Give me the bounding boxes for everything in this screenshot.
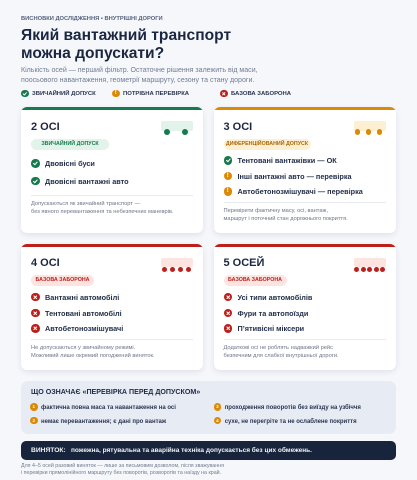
- legend: ЗВИЧАЙНИЙ ДОПУСК: [32, 90, 96, 96]
- note: Можливий лише окремий погоджений виняток.: [31, 353, 155, 359]
- exception banner: пожежна, рятувальна та аварійна техніка допускається без цих обмежень.: [71, 447, 312, 454]
- note: маршрут і поточний стан дорожнього покриття.: [224, 216, 348, 222]
- panel: 3 axles: !: [227, 172, 229, 178]
- intro text: [21, 66, 258, 84]
- panel: what the check means: проходження поворотів без виїзду на узбіччя: [225, 405, 361, 411]
- note: [31, 345, 155, 359]
- item: [31, 324, 123, 333]
- panel: what the check means: фактична повна маса та навантаження на осі: [41, 405, 176, 411]
- panel: what the check means: 1: [32, 404, 35, 409]
- panel: 2 axles: Двовісні буси: [45, 159, 95, 168]
- panel: 5 axles: Фури та автопоїзди: [238, 309, 308, 318]
- exception banner: [21, 441, 396, 460]
- note: Допускаються як звичайний транспорт —: [31, 201, 140, 207]
- panel: what the check means: [21, 381, 396, 434]
- heading: 3 axles: 3 ОСІ: [224, 120, 252, 132]
- panel: 3 axles: Автобетонозмішувачі — перевірка: [238, 187, 363, 196]
- intro text: Кількість осей — перший фільтр. Остаточне рішення залежить від маси,: [21, 67, 258, 74]
- badge: БАЗОВА ЗАБОРОНА: [228, 277, 282, 283]
- panel: 4 axles: Вантажні автомобілі: [45, 293, 119, 302]
- title: можна допускати?: [21, 45, 164, 62]
- item: [31, 159, 95, 168]
- note: [224, 344, 339, 359]
- note: без явного перевантаження та небезпечних маневрів.: [31, 209, 174, 215]
- panel: 5 axles: П’ятивісні міксери: [238, 324, 304, 333]
- item: [224, 172, 352, 180]
- badge: [31, 138, 109, 150]
- footnote: [21, 463, 224, 476]
- exception banner: ВИНЯТОК:: [31, 447, 66, 454]
- check 4: [214, 417, 357, 425]
- item: [31, 293, 119, 302]
- check 2: [30, 417, 166, 425]
- check 3: [214, 403, 361, 411]
- legend: ПОТРІБНА ПЕРЕВІРКА: [123, 90, 189, 96]
- panel: what the check means: 2: [32, 418, 35, 423]
- footnote: Для 4–5 осей разовий виняток — лише за письмовим дозволом, після зважування: [21, 463, 224, 469]
- panel: 5 axles: [214, 244, 396, 370]
- legend: [21, 90, 291, 97]
- legend: БАЗОВА ЗАБОРОНА: [231, 90, 291, 96]
- item: [31, 176, 129, 186]
- footnote: і перевірки прямолінійного маршруту без поворотів, розворотів та наїзду на край.: [21, 470, 221, 476]
- badge: БАЗОВА ЗАБОРОНА: [36, 277, 89, 283]
- note: [224, 208, 348, 222]
- heading: 2 axles: 2 ОСІ: [31, 120, 60, 132]
- note: Не допускаються у звичайному режимі.: [31, 345, 135, 351]
- title: [21, 26, 231, 62]
- note: Додаткові осі не роблять надважкий рейс: [224, 345, 333, 351]
- item: [224, 293, 312, 302]
- icon: 5-axle truck: [354, 258, 386, 272]
- panel: 2 axles: Двовісні вантажні авто: [45, 176, 129, 186]
- item: [224, 187, 363, 196]
- note: Перевірити фактичну масу, осі, вантаж,: [224, 208, 328, 214]
- item: [224, 309, 308, 318]
- badge: [224, 138, 310, 150]
- heading: 5 axles: 5 ОСЕЙ: [224, 257, 264, 269]
- panel: 4 axles: Тентовані автомобілі: [45, 309, 122, 318]
- icon: 3-axle truck: [354, 121, 386, 135]
- panel: 3 axles: Тентовані вантажівки — ОК: [238, 156, 337, 165]
- badge: ЗВИЧАЙНИЙ ДОПУСК: [41, 140, 99, 146]
- panel: what the check means: сухе, не перегріте та не ослаблене покриття: [225, 419, 357, 425]
- item: [224, 324, 304, 333]
- badge: [31, 275, 94, 286]
- note: безпечним для слабкої внутрішньої дороги.: [224, 353, 339, 359]
- panel: 4 axles: [21, 244, 203, 370]
- panel: 3 axles: !: [227, 187, 229, 194]
- item: [224, 156, 337, 165]
- intro text: поосьового навантаження, геометрії маршруту, сезону та стану дороги.: [21, 77, 254, 84]
- legend: banned: [220, 90, 291, 97]
- panel: 3 axles: Інші вантажні авто — перевірка: [238, 172, 352, 180]
- icon: 2-axle truck: [161, 121, 193, 135]
- title: Який вантажний транспорт: [21, 26, 231, 44]
- eyebrow: ВИСНОВКИ ДОСЛІДЖЕННЯ • ВНУТРІШНІ ДОРОГИ: [21, 16, 163, 22]
- panel: what the check means: немає перевантаження; є дані про вантаж: [41, 419, 166, 425]
- panel: 2 axles: [21, 107, 203, 233]
- panel: 3 axles: [214, 107, 396, 233]
- item: [31, 309, 122, 318]
- panel: 5 axles: Усі типи автомобілів: [238, 293, 312, 302]
- panel: what the check means: 3: [216, 404, 219, 409]
- legend: normal: [21, 90, 96, 97]
- check 1: [30, 403, 176, 411]
- panel heading: ЩО ОЗНАЧАЄ «ПЕРЕВІРКА ПЕРЕД ДОПУСКОМ»: [31, 388, 200, 396]
- icon: 4-axle truck: [161, 258, 193, 272]
- heading: 4 axles: 4 ОСІ: [31, 257, 60, 269]
- legend: !: [115, 90, 117, 96]
- panel: 4 axles: Автобетонозмішувачі: [45, 324, 123, 333]
- badge: [224, 275, 286, 286]
- panel: what the check means: 4: [216, 418, 219, 423]
- note: [31, 201, 174, 215]
- legend: check: [112, 90, 189, 97]
- badge: ДИФЕРЕНЦІЙОВАНИЙ ДОПУСК: [226, 140, 308, 146]
